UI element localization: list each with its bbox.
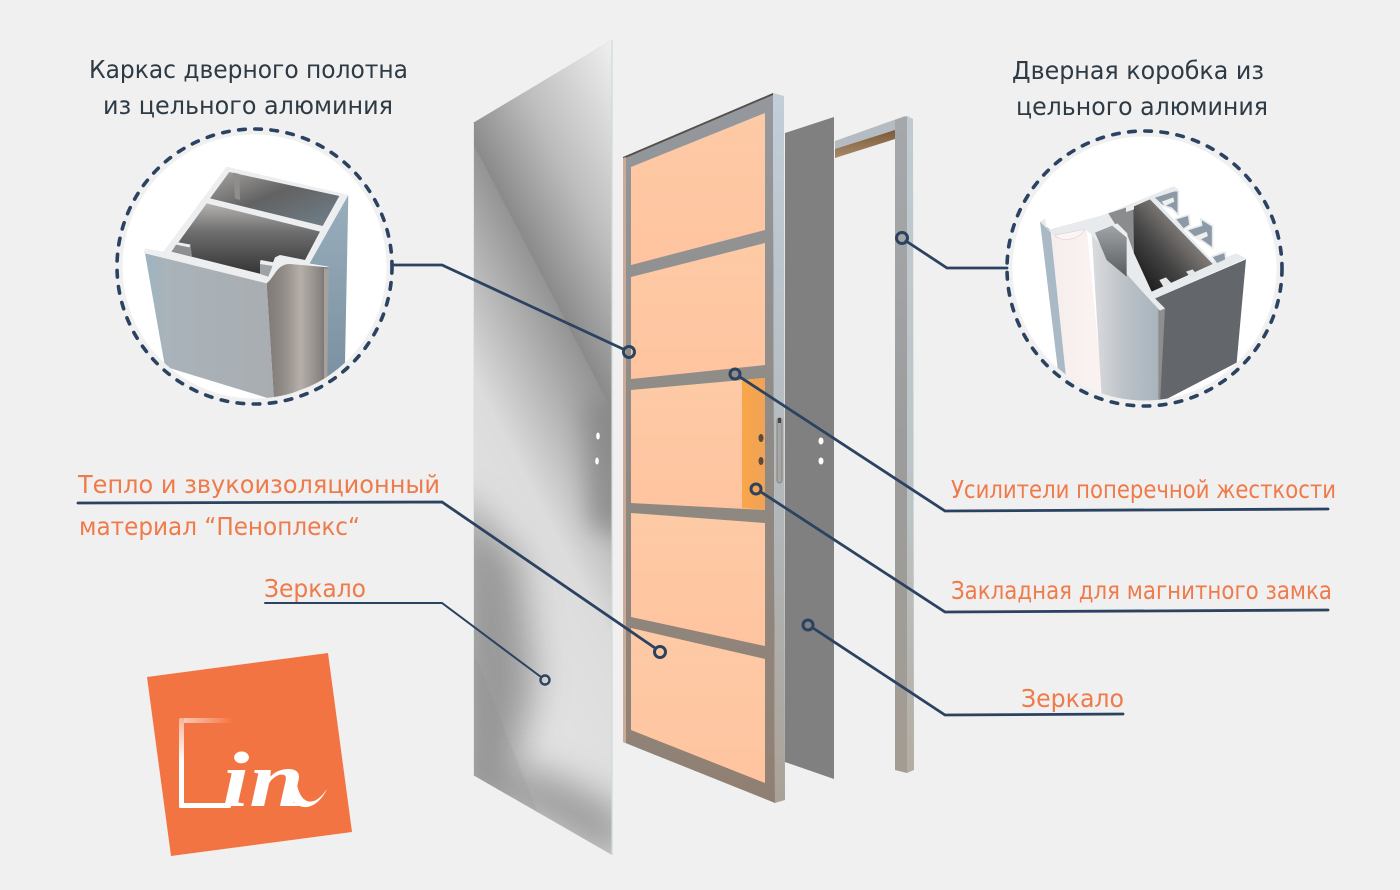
heading: door leaf frame: из цельного алюминия [103, 91, 393, 120]
leader: right mirror [803, 620, 1123, 715]
logo [147, 653, 352, 856]
label: insulation: Тепло и звукоизоляционный [77, 470, 440, 499]
heading: door leaf frame: Каркас дверного полотна [89, 55, 408, 84]
magnetic lock insert [742, 378, 765, 510]
heading: door jamb: Дверная коробка из [1012, 56, 1264, 85]
insulation panels [631, 113, 765, 783]
top rim [1040, 186, 1246, 311]
leader: reinforcements [730, 369, 1328, 511]
leader: lock insert [751, 484, 1328, 612]
icon: door profile section [143, 167, 348, 400]
fins [1153, 191, 1226, 264]
heading: door jamb: цельного алюминия [1016, 92, 1268, 121]
tabs [172, 244, 192, 256]
leader: left mirror [265, 603, 550, 684]
icon: jamb profile section [1040, 186, 1246, 403]
label: reinforcements: Усилители поперечной жесткости [951, 475, 1336, 504]
label: right mirror: Зеркало [1021, 684, 1124, 713]
logo: in [222, 736, 304, 823]
back mirror panel [785, 117, 834, 779]
leader: jamb [896, 232, 1007, 268]
door leaf frame with insulation [623, 93, 785, 803]
door frame jamb [835, 116, 914, 773]
front mirror panel [473, 40, 612, 855]
heading: door jamb [1012, 56, 1268, 121]
callout: door leaf aluminium profile [117, 129, 392, 404]
leader: insulation [78, 502, 666, 658]
heading: door leaf frame [89, 55, 408, 120]
callout: jamb aluminium profile [1007, 131, 1282, 406]
leader: door leaf [392, 265, 634, 358]
label: insulation [77, 470, 440, 541]
handle slot [777, 418, 782, 483]
label: insulation: материал “Пеноплекс“ [79, 512, 360, 541]
cavities [1132, 199, 1213, 292]
label: left mirror: Зеркало [264, 574, 366, 603]
label: lock insert: Закладная для магнитного замка [951, 576, 1332, 605]
